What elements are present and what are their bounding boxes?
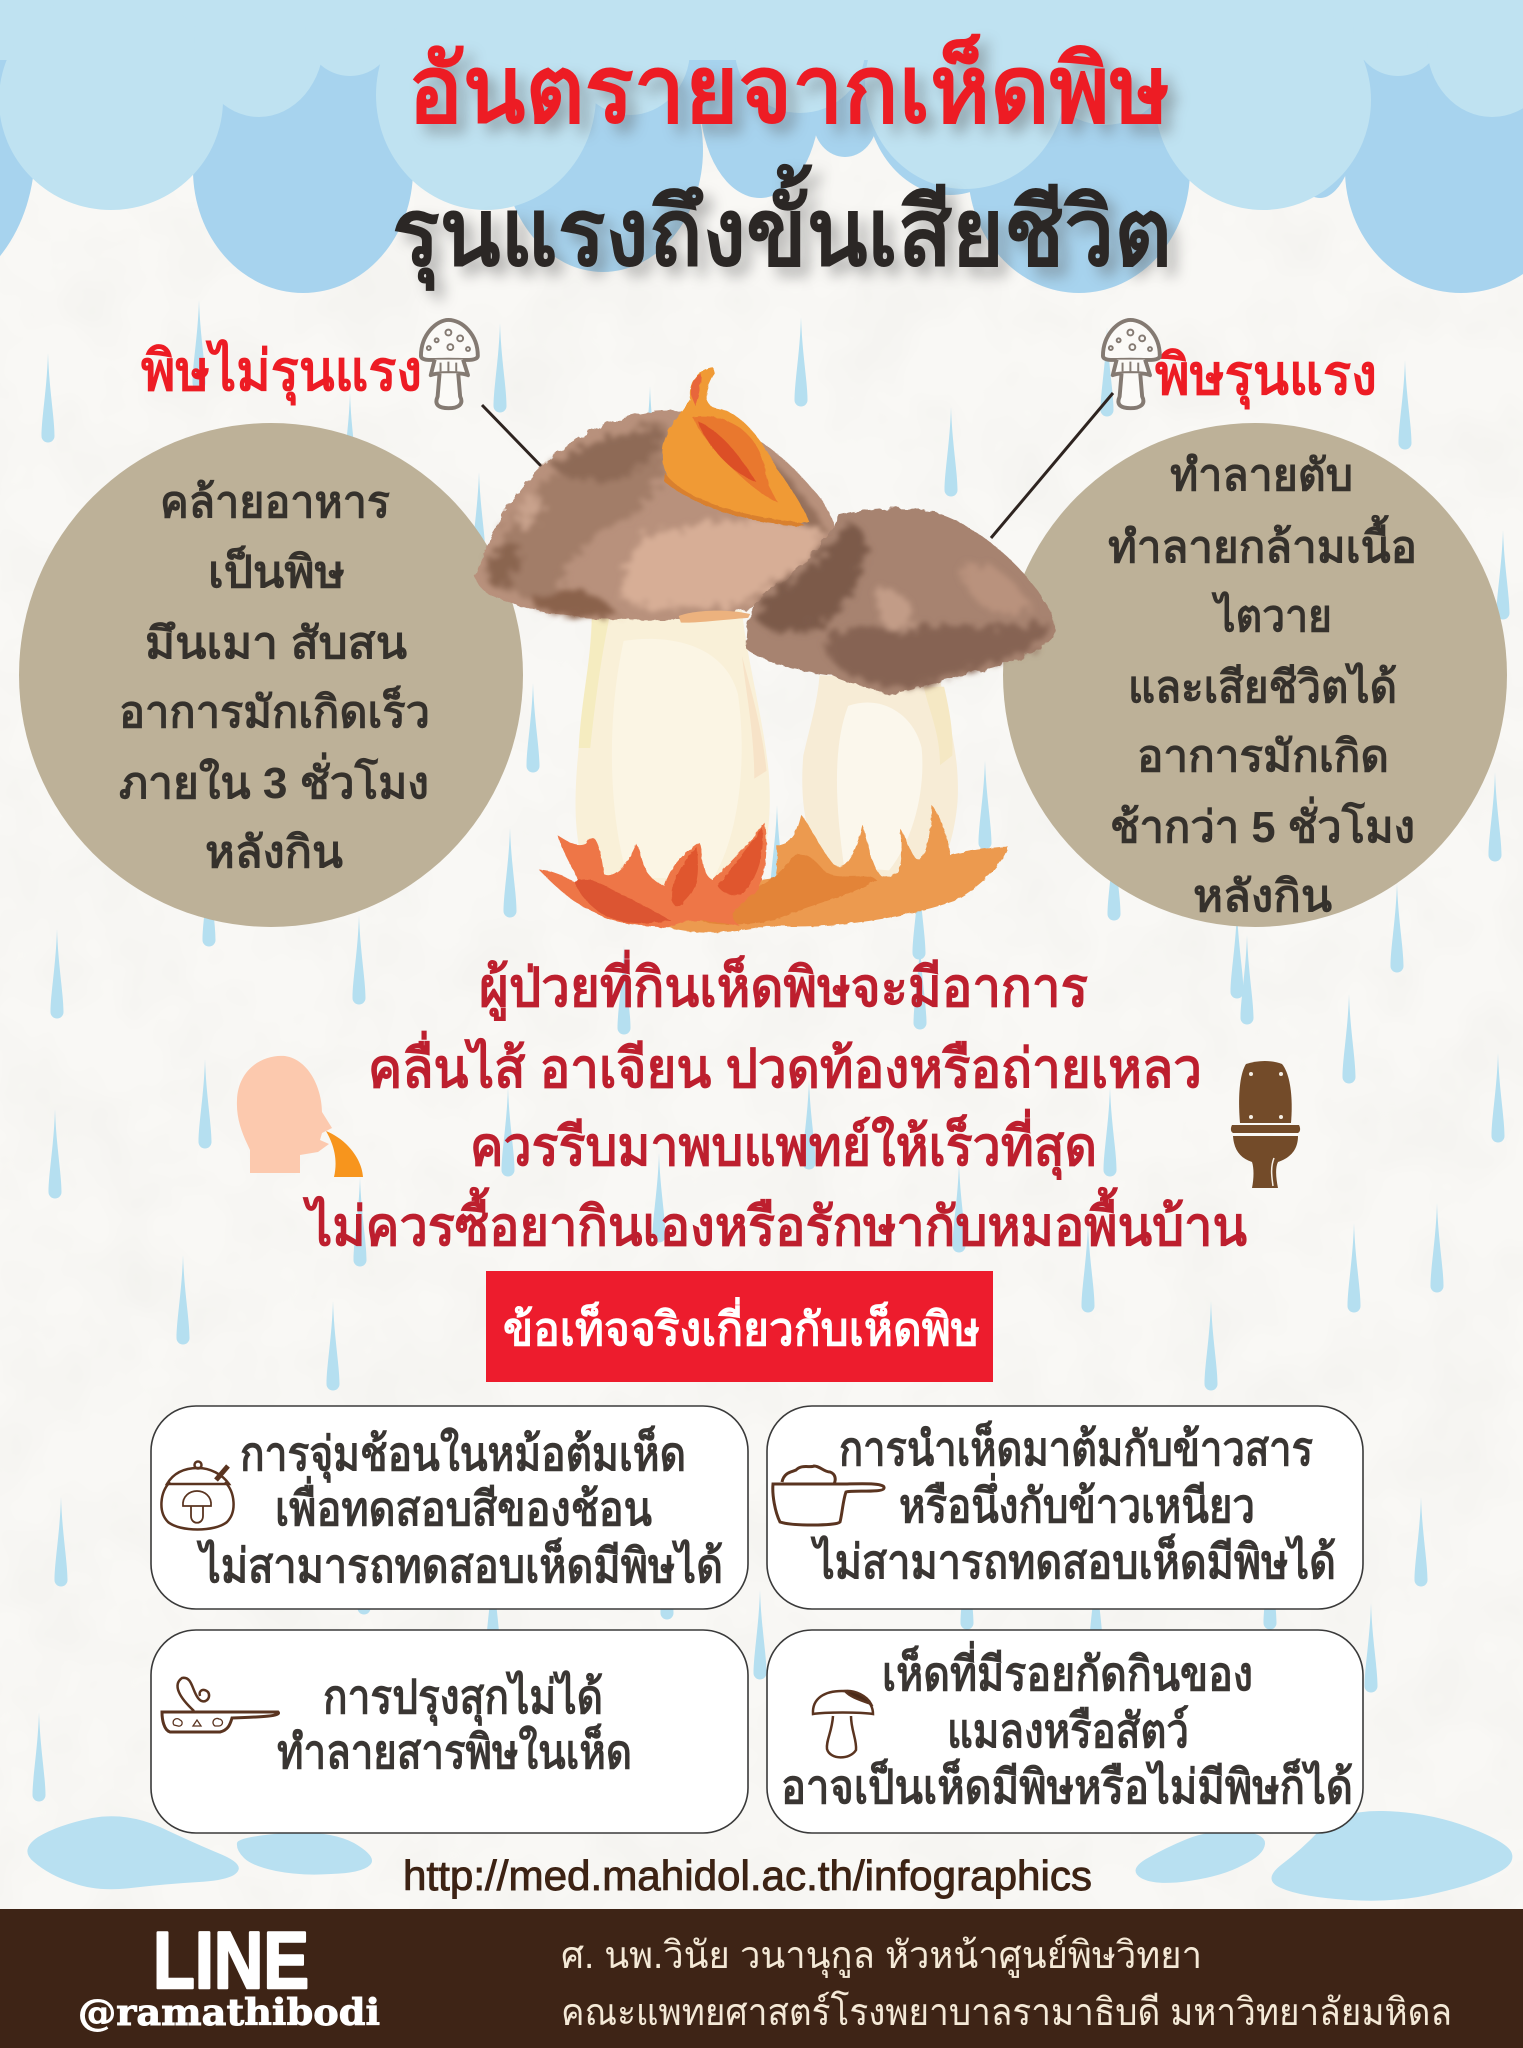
card text	[196, 1424, 723, 1592]
card text: แมลงหรือสัตว์	[947, 1704, 1189, 1757]
small stem	[802, 675, 958, 886]
panel: spoon test card	[151, 1406, 748, 1609]
panel: cooking card	[151, 1630, 748, 1833]
card text: ไม่สามารถทดสอบเห็ดมีพิษได้	[196, 1536, 723, 1592]
mild poison text: คล้ายอาหาร	[160, 478, 390, 527]
symptoms text: ไม่ควรซื้อยากินเองหรือรักษากับหมอพื้นบ้าน	[302, 1187, 1247, 1257]
line handle: @ramathibodi	[78, 1992, 380, 2034]
leaf on cap	[662, 367, 809, 526]
button: mushroom facts heading: ข้อเท็จจริงเกี่ยวกับเห็ดพิษ	[503, 1297, 980, 1355]
panel: rice test card	[767, 1406, 1363, 1609]
large stem	[576, 610, 770, 893]
arrow: left pointer	[482, 405, 542, 467]
symptoms text: ผู้ป่วยที่กินเห็ดพิษจะมีอาการ	[479, 949, 1088, 1021]
circle: mild poison	[19, 423, 523, 927]
illustration: watercolor mushrooms	[474, 367, 1056, 934]
raindrops	[32, 300, 1510, 1802]
severe poison text: ทำลายตับ	[1170, 451, 1353, 500]
icon: person vomiting	[237, 1056, 363, 1177]
panel: severe poison	[1003, 320, 1507, 927]
card text: ไม่สามารถทดสอบเห็ดมีพิษได้	[810, 1532, 1336, 1588]
icon: pot	[161, 1462, 234, 1530]
title line 2: รุนแรงถึงขั้นเสียชีวิต	[392, 163, 1172, 291]
small cap	[746, 508, 1053, 694]
panel: mild poison	[19, 320, 523, 927]
mild poison text: ภายใน 3 ชั่วโมง	[119, 752, 429, 808]
puddles	[27, 1811, 1512, 1901]
card text: การจุ่มช้อนในหม้อต้มเห็ด	[240, 1424, 686, 1483]
mild poison text: มึนเมา สับสน	[145, 619, 407, 668]
arrow: right pointer	[991, 393, 1113, 538]
credit lines: คณะแพทยศาสตร์โรงพยาบาลรามาธิบดี มหาวิทยาลัยมหิดล	[561, 1990, 1452, 2034]
clouds	[0, 0, 1523, 295]
icon: bitten mushroom	[813, 1691, 873, 1757]
icon: mushroom right	[1103, 320, 1160, 408]
severe poison text: ไตวาย	[1211, 590, 1332, 641]
panel: bitten mushroom card	[767, 1630, 1363, 1833]
icon: rice pot	[773, 1466, 884, 1525]
large cap	[475, 411, 836, 620]
mild poison text: อาการมักเกิดเร็ว	[119, 685, 430, 737]
icon: mushroom left	[421, 320, 478, 408]
card text: อาจเป็นเห็ดมีพิษหรือไม่มีพิษก็ได้	[781, 1757, 1353, 1813]
card text	[810, 1419, 1336, 1588]
icon: toilet	[1231, 1061, 1300, 1188]
symptoms text	[302, 949, 1247, 1257]
title	[392, 32, 1172, 291]
heading: mild poison: พิษไม่รุนแรง	[141, 338, 422, 406]
severe poison text: หลังกิน	[1193, 872, 1332, 921]
credit lines: ศ. นพ.วินัย วนานุกูล หัวหน้าศูนย์พิษวิทยา	[561, 1934, 1202, 1978]
card text	[277, 1669, 632, 1778]
card text	[781, 1640, 1353, 1813]
card text: เห็ดที่มีรอยกัดกินของ	[882, 1640, 1253, 1700]
button: mushroom facts heading	[486, 1271, 993, 1382]
icon: pan	[162, 1678, 279, 1732]
mild poison text	[119, 478, 430, 877]
symptoms text: ควรรีบมาพบแพทย์ให้เร็วที่สุด	[470, 1108, 1097, 1181]
card text: ทำลายสารพิษในเห็ด	[277, 1722, 632, 1778]
source url: http://med.mahidol.ac.th/infographics	[403, 1852, 1092, 1899]
credit lines	[561, 1934, 1452, 2034]
card text: การปรุงสุกไม่ได้	[323, 1669, 603, 1726]
mild poison text: เป็นพิษ	[208, 545, 345, 597]
card text: หรือนึ่งกับข้าวเหนียว	[899, 1472, 1255, 1532]
heading: severe poison: พิษรุนแรง	[1155, 343, 1377, 410]
base leaves	[669, 805, 1008, 932]
line logo text: LINE	[153, 1916, 309, 2006]
severe poison text: อาการมักเกิด	[1137, 732, 1389, 781]
symptoms text: คลื่นไส้ อาเจียน ปวดท้องหรือถ่ายเหลว	[368, 1030, 1202, 1099]
severe poison text	[1108, 451, 1417, 921]
title line 1: อันตรายจากเห็ดพิษ	[408, 32, 1170, 142]
severe poison text: ทำลายกล้ามเนื้อ	[1108, 514, 1417, 572]
circle: severe poison	[1003, 423, 1507, 927]
footer bar	[0, 1909, 1523, 2048]
card text: เพื่อทดสอบสีของช้อน	[275, 1475, 652, 1535]
severe poison text: และเสียชีวิตได้	[1128, 661, 1397, 712]
card text: การนำเห็ดมาต้มกับข้าวสาร	[839, 1419, 1313, 1475]
severe poison text: ช้ากว่า 5 ชั่วโมง	[1110, 796, 1415, 852]
mild poison text: หลังกิน	[205, 828, 343, 877]
